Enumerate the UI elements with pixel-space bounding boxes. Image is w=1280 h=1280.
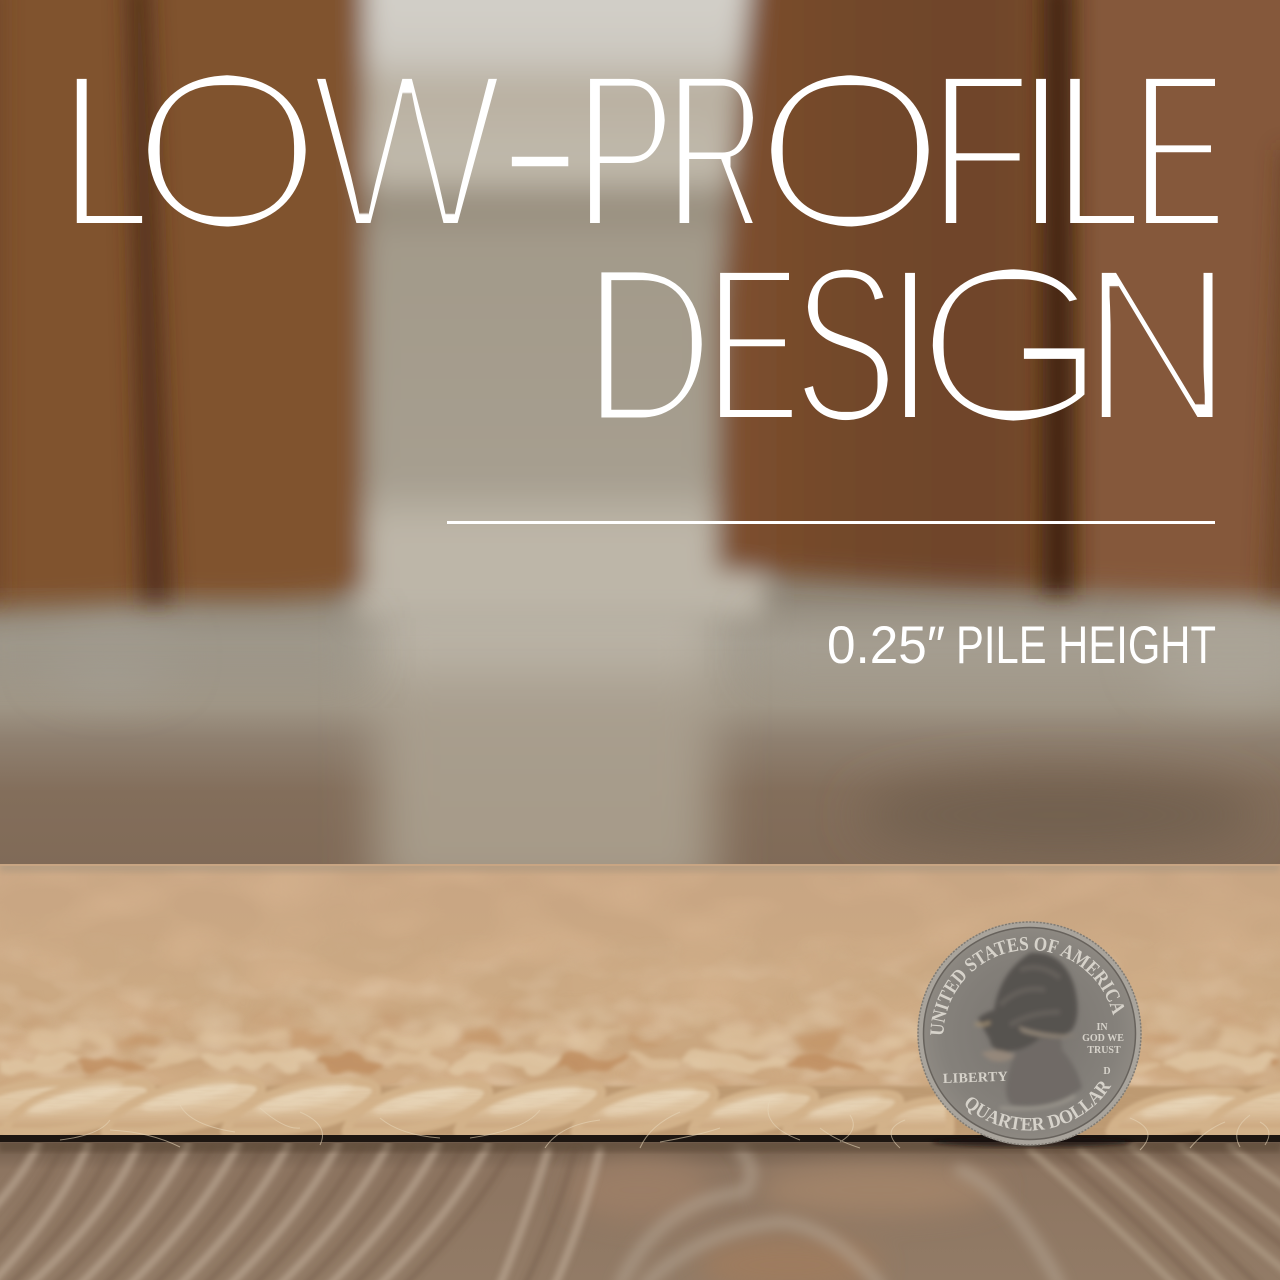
diagonal grain at right bbox=[1030, 1146, 1280, 1280]
curtain fold: left bbox=[126, 0, 172, 605]
title line 1: O bbox=[130, 26, 324, 276]
dark gap under rug bbox=[0, 1135, 1280, 1142]
curtain edge: far right bbox=[1264, 150, 1280, 600]
title line 2: S bbox=[794, 219, 897, 470]
wood floor with grain bbox=[0, 1142, 1280, 1280]
title line 1: I bbox=[1010, 26, 1072, 276]
coin inscriptions: IN bbox=[1096, 1022, 1108, 1033]
rope highlights bbox=[24, 1075, 1221, 1122]
background: blurred room with curtains and doorway bbox=[0, 0, 1280, 900]
coin inscriptions: QUARTER DOLLAR bbox=[966, 1082, 1112, 1131]
rug surface bbox=[0, 860, 1280, 1140]
title line 2: G bbox=[914, 219, 1110, 470]
title line 1: - bbox=[497, 19, 583, 269]
light reflection at lower right bbox=[1150, 610, 1280, 690]
title line 1: L bbox=[61, 26, 150, 276]
dark grooves bbox=[0, 1160, 1280, 1280]
dark reflection at lower right bbox=[860, 775, 1260, 855]
coin inscriptions: UNITED STATES OF AMERICA bbox=[930, 937, 1124, 1035]
title line 2: D bbox=[583, 220, 714, 470]
title line 2: I bbox=[879, 220, 941, 470]
coin inscriptions: LIBERTY bbox=[943, 1070, 1008, 1087]
coin inscriptions: TRUST bbox=[1087, 1045, 1121, 1056]
title: LOW-PROFILE DESIGN bbox=[61, 19, 1235, 470]
light ridges bbox=[0, 1145, 600, 1280]
title line 1: E bbox=[1133, 27, 1225, 276]
coin inscriptions: GOD WE bbox=[1082, 1033, 1124, 1044]
woven braid rows bbox=[79, 1006, 1236, 1031]
stray rug fibers bbox=[60, 1100, 1269, 1150]
title line 1: F bbox=[930, 25, 1031, 276]
curtain: left bbox=[0, 0, 365, 612]
coin portrait bbox=[975, 953, 1082, 1109]
title line 1 bbox=[61, 19, 1225, 276]
title line 1: P bbox=[576, 26, 675, 276]
subtitle: pile height: PILE HEIGHT bbox=[956, 616, 1216, 675]
coin inscriptions: D bbox=[1103, 1066, 1111, 1077]
subtitle: pile height: 0.25″ bbox=[827, 616, 945, 675]
warm patches bbox=[712, 1235, 858, 1280]
title line 2: N bbox=[1080, 221, 1235, 470]
title line 1: O bbox=[753, 26, 947, 276]
title line 2 bbox=[583, 219, 1235, 470]
title line 2: E bbox=[707, 221, 799, 470]
divider rule bbox=[447, 521, 1215, 524]
subtitle: pile height bbox=[827, 616, 1216, 675]
light reflection at lower left bbox=[50, 625, 170, 685]
coin inscriptions bbox=[930, 937, 1124, 1131]
doorway bbox=[355, 0, 765, 620]
gray grain arcs bbox=[620, 1150, 1060, 1280]
title line 1: L bbox=[1055, 25, 1142, 276]
icon: quarter dollar coin bbox=[917, 921, 1142, 1149]
title line 1: R bbox=[667, 27, 765, 276]
soft lower curtain edge: right bbox=[760, 618, 1280, 678]
title line 1: W bbox=[309, 25, 505, 276]
rope fibre texture bbox=[0, 1082, 1280, 1134]
hair highlights bbox=[1000, 967, 1060, 1025]
doorway lower part bbox=[375, 600, 715, 900]
rug edge: braided rope strands bbox=[0, 1075, 1280, 1136]
soft lower curtain edge: left bbox=[0, 618, 360, 678]
curtain fold: right bbox=[1042, 0, 1074, 595]
curtain: right bbox=[716, 0, 1280, 600]
